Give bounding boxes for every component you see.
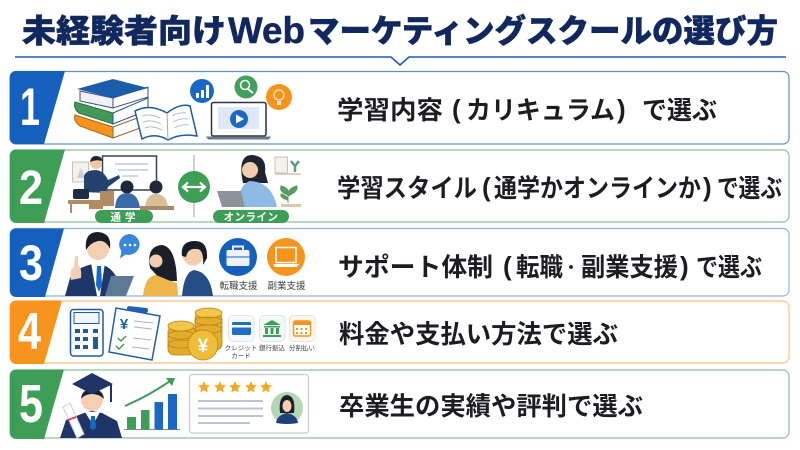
payment: installments: [289, 316, 315, 352]
icon: search circle: [234, 76, 258, 98]
panel: 2 learning style: [10, 150, 789, 224]
number badge 3: 3: [19, 235, 43, 291]
icon: laptop with video: [206, 102, 271, 140]
label 2: ): [703, 172, 712, 202]
number badge 3: [10, 228, 64, 297]
title: マーケティングスクールの選び方: [308, 13, 778, 49]
label 2: (: [482, 172, 491, 202]
number badge 1: 1: [20, 78, 40, 137]
payment: credit card: [225, 316, 257, 360]
label 1: カリキュラム: [466, 97, 615, 125]
number badge 2: 2: [19, 162, 43, 215]
label 3: で選ぶ: [696, 254, 762, 282]
payment: credit card: クレジット: [225, 344, 257, 352]
icon: double arrow: [178, 171, 210, 203]
review card: [190, 374, 308, 433]
number badge 5: [10, 370, 64, 439]
label 3: (: [503, 251, 512, 281]
star rating: [198, 381, 272, 392]
label 1: 学習内容: [337, 97, 443, 125]
payment: credit card: カード: [231, 352, 251, 360]
icon: books: [74, 79, 148, 138]
icon: briefcase (career support): [219, 238, 258, 292]
title: [22, 10, 778, 51]
icon: calculator: [70, 310, 103, 356]
icon: laptop (side job support): 副業支援: [267, 280, 306, 292]
icon: fee checklist: [109, 306, 160, 360]
number badge 5: 5: [19, 374, 43, 434]
pill: オンライン: オンライン: [224, 212, 278, 224]
online scene: [213, 155, 301, 224]
payment: installments: 分割払い: [289, 343, 315, 352]
payment: bank transfer: [259, 316, 286, 352]
number badge 2: [10, 150, 65, 223]
number badge 4: [10, 300, 62, 364]
icon: open book: [135, 105, 197, 140]
label 3: [338, 251, 762, 282]
panel: 1 curriculum: [10, 71, 789, 144]
label 5: 卒業生の実績や評判で選ぶ: [339, 393, 643, 421]
label 1: (: [452, 94, 461, 124]
label 3: 副業支援: [581, 254, 678, 282]
icon: yen coins: ¥: [198, 336, 209, 357]
label 2: 学習スタイル: [337, 175, 477, 203]
label 3: ): [680, 251, 689, 281]
label 2: [337, 172, 782, 203]
label 1: [337, 94, 717, 125]
icon: chart circle: [190, 79, 214, 103]
icon: yen coins: [168, 308, 222, 360]
classroom scene: [68, 156, 174, 224]
advisor and students: [65, 232, 213, 296]
pill: 通学: 通学: [110, 210, 140, 224]
label 4: 料金や支払い方法で選ぶ: [339, 321, 618, 349]
label 1: で選ぶ: [642, 97, 717, 125]
icon: laptop (side job support): [267, 238, 306, 292]
label 3: 転職: [516, 254, 563, 282]
icon: fee checklist: ¥: [120, 316, 129, 333]
panel: 3 support: [10, 228, 789, 297]
payment: bank transfer: 銀行振込: [259, 343, 286, 352]
number badge 4: 4: [18, 303, 41, 361]
title: Web: [228, 10, 305, 51]
icon: briefcase (career support): 転職支援: [219, 280, 258, 292]
label 3: サポート体制: [338, 254, 493, 282]
label 1: ): [617, 94, 626, 124]
reviewer avatar: [271, 392, 303, 424]
panel: 5 graduates: [10, 370, 789, 439]
label 2: 通学かオンラインか: [494, 175, 701, 203]
label 2: で選ぶ: [717, 175, 782, 203]
graduate: [60, 373, 122, 438]
number badge 1: [10, 71, 65, 144]
panel: 4 price: [10, 300, 789, 364]
growth bar chart: [124, 378, 180, 430]
title: 未経験者向け: [22, 13, 226, 49]
icon: light bulb circle: [266, 84, 292, 110]
